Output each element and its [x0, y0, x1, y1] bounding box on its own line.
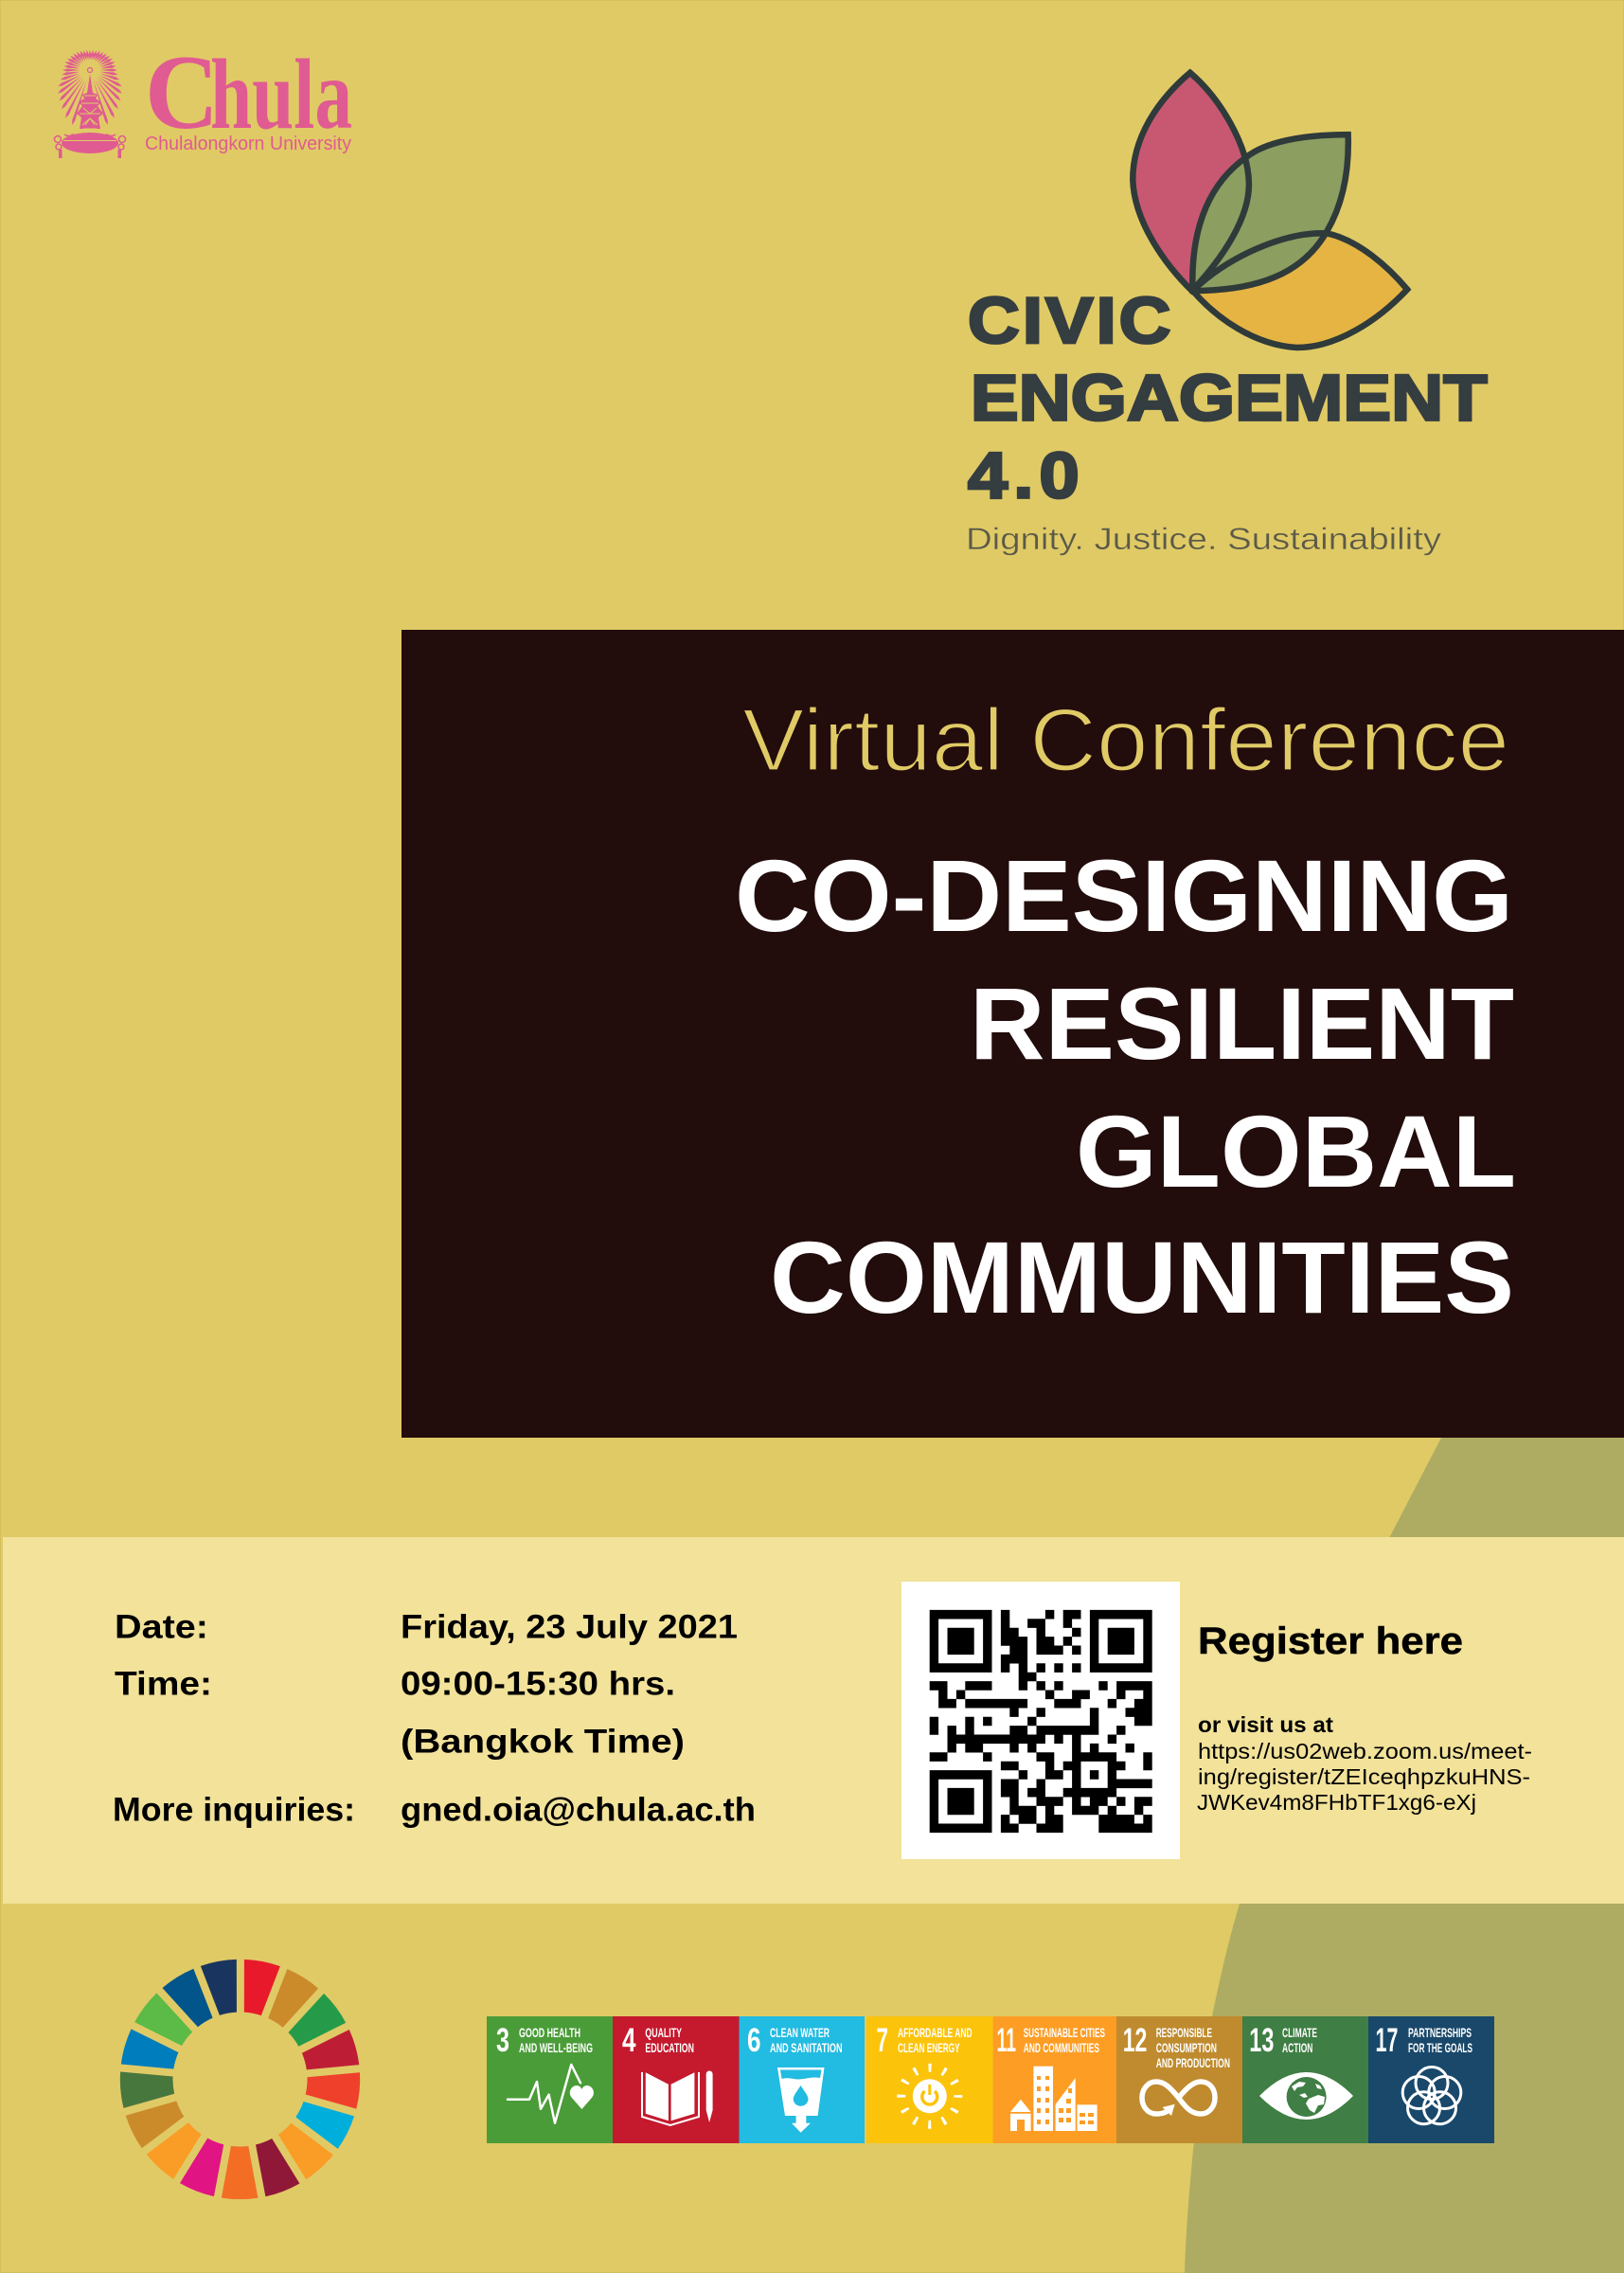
logo wordmark — [145, 34, 352, 152]
tagline: Dignity. Justice. Sustainability — [966, 522, 1441, 556]
title: GLOBAL — [1076, 1094, 1516, 1208]
panel: event details band — [3, 1537, 1624, 1904]
tile: goal 12: AND PRODUCTION — [1156, 2055, 1230, 2070]
register link text: https://us02web.zoom.us/meet- — [1198, 1739, 1532, 1763]
icon: three leaves — [1133, 73, 1407, 348]
tile: goal 13: CLIMATE — [1282, 2025, 1317, 2040]
tile: goal 4: QUALITY — [645, 2025, 682, 2040]
register link text: ing/register/tZEIceqhpzkuHNS- — [1198, 1764, 1530, 1789]
tile: goal 12: CONSUMPTION — [1156, 2040, 1217, 2055]
tile: goal 11 — [993, 2016, 1116, 2143]
Chula logo — [55, 34, 352, 158]
tile: goal 17 — [1368, 2016, 1494, 2143]
Civic Engagement logo — [966, 73, 1488, 556]
title: RESILIENT — [970, 966, 1514, 1081]
heading: virtual conference: Virtual Conference — [742, 689, 1509, 790]
tile: goal 6: AND SANITATION — [770, 2040, 843, 2055]
tile: goal 7 — [866, 2016, 993, 2143]
tile: goal 4: 4 — [622, 2022, 636, 2059]
tile: goal 17: 17 — [1375, 2022, 1398, 2059]
tile: goal 4: EDUCATION — [645, 2040, 694, 2055]
olive background shape lower — [1185, 1904, 1624, 2273]
logo text: civic: CIVIC — [968, 284, 1171, 357]
title: CO-DESIGNING — [735, 838, 1513, 953]
event details text: Date: — [115, 1608, 208, 1646]
tile: goal 3 — [487, 2016, 613, 2143]
event details text: Friday, 23 July 2021 — [401, 1608, 738, 1646]
tile: goal 12: 12 — [1123, 2022, 1147, 2059]
event details text: More inquiries: — [113, 1792, 355, 1828]
tile: goal 7: 7 — [877, 2022, 888, 2059]
register link text: JWKev4m8FHbTF1xg6-eXj — [1197, 1790, 1476, 1815]
panel: conference title — [402, 630, 1624, 1438]
tile: goal 6 — [739, 2016, 865, 2143]
logo subtitle: Chulalongkorn University — [145, 134, 351, 154]
event details text: gned.oia@chula.ac.th — [401, 1792, 756, 1828]
logo wordmark: hula — [210, 39, 352, 150]
logo wordmark: C — [145, 34, 219, 152]
tile: goal 4 — [613, 2016, 739, 2143]
tile: goal 12 — [1116, 2016, 1242, 2143]
SDG colour wheel — [114, 1953, 366, 2205]
tile: goal 12: RESPONSIBLE — [1156, 2025, 1212, 2040]
tile: goal 3: GOOD HEALTH — [519, 2025, 580, 2040]
tile: goal 11: 11 — [996, 2022, 1016, 2059]
olive background shape upper — [1389, 1438, 1624, 1538]
tile: goal 6: 6 — [747, 2022, 761, 2059]
logo text: version: 4.0 — [968, 439, 1080, 512]
tile: goal 11: AND COMMUNITIES — [1024, 2040, 1099, 2055]
tile: goal 13: ACTION — [1282, 2040, 1312, 2055]
event details text: Time: — [115, 1665, 212, 1703]
QR code — [901, 1582, 1180, 1859]
tile: goal 17: FOR THE GOALS — [1408, 2040, 1472, 2055]
tile: goal 13 — [1242, 2016, 1368, 2143]
tile: goal 6: CLEAN WATER — [770, 2025, 830, 2040]
icon: Chula emblem — [55, 50, 125, 158]
event details text — [113, 1608, 756, 1828]
event details text: 09:00-15:30 hrs. — [401, 1665, 675, 1703]
tile: goal 3: AND WELL-BEING — [519, 2040, 593, 2055]
register link text — [1197, 1712, 1532, 1815]
logo text: engagement: ENGAGEMENT — [971, 362, 1488, 435]
tile: goal 7: AFFORDABLE AND — [898, 2025, 973, 2040]
register heading: Register here — [1198, 1620, 1463, 1662]
title: COMMUNITIES — [770, 1220, 1514, 1334]
tile: goal 7: CLEAN ENERGY — [898, 2040, 960, 2055]
tile: goal 3: 3 — [496, 2022, 509, 2059]
tile: goal 13: 13 — [1249, 2022, 1274, 2059]
SDG goal tiles — [487, 2016, 1494, 2143]
tile: goal 17: PARTNERSHIPS — [1408, 2025, 1472, 2040]
title — [735, 838, 1516, 1334]
tile: goal 11: SUSTAINABLE CITIES — [1024, 2025, 1105, 2040]
register link text: or visit us at — [1198, 1712, 1333, 1737]
event details text: (Bangkok Time) — [401, 1724, 685, 1760]
